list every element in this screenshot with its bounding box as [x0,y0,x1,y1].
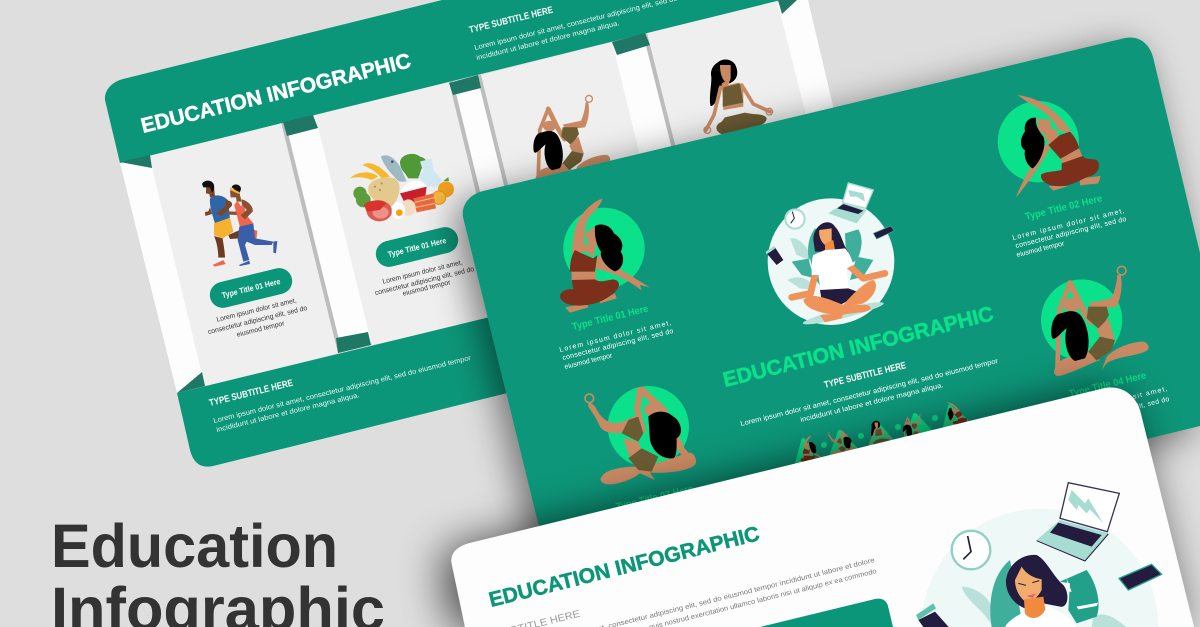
yoga figure 3 [585,386,696,484]
yoga figure 2 [998,95,1101,197]
icon: yoga pose column 3 [533,95,610,182]
text 01: consectetur adipiscing elit, sed do [562,328,674,362]
panel: front white slide [451,387,1194,627]
main title: Education [51,512,338,580]
title 01: Type Title 01 Here [571,304,650,333]
icon: meditating woman column 4 [704,60,773,135]
text 01: eiusmod tempor [564,352,614,371]
mini yoga icon row [797,402,968,465]
panel: back slide with four columns [105,0,860,467]
bottom band body text: Lorem ipsum dolor sit amet, consectetur adipiscing elit, sed do eiusmod tempor [213,355,473,425]
column 1 body text: Lorem ipsum dolor sit amet, [216,297,297,324]
illustration: stressed woman with laptop, clock, phone [916,483,1162,627]
text 01: Lorem ipsum dolor sit amet, [559,320,672,354]
central illustration: meditating woman [766,183,894,328]
body text: incididunt ut labore et dolore magna aliqua. [800,382,944,424]
header body text: incididunt ut labore et dolore magna aliqua. [476,20,620,62]
folded tabs [120,0,797,393]
column 2 body text: consectetur adipiscing elit, sed do [374,266,475,297]
text 02: consectetur adipiscing elit, sed do [1015,216,1127,250]
column 1 pill label: Type Title 01 Here [221,277,282,300]
bottom band [177,300,600,467]
subtitle: TYPE SUBTITLE HERE [823,360,907,391]
text 01 [559,320,674,371]
text 02 [1012,208,1127,259]
column 3 panel [481,42,672,318]
heading: education infographic: EDUCATION INFOGRAPHIC [721,302,996,392]
body text: Lorem ipsum dolor sit amet, consectetur adipiscing elit, sed do eiusmod tempor [740,358,1000,428]
header band [105,0,781,163]
heading: EDUCATION INFOGRAPHIC [487,522,762,612]
column 2 body text: Lorem ipsum dolor sit amet, [382,259,463,286]
main title [51,512,385,627]
column 4 panel [647,0,840,283]
bottom band body text: incididunt ut labore et dolore magna aliqua. [216,392,360,434]
panel: middle green slide [463,37,1200,584]
yoga figure 1 [560,198,650,313]
header subtitle: TYPE SUBTITLE HERE [468,5,554,36]
column 1 pill label [207,265,295,311]
yoga figure 4 [1041,266,1149,376]
column 1 body text: eiusmod tempor [236,320,286,339]
column 1 body text: consectetur adipiscing elit, sed do [207,305,308,336]
bottom band subtitle: TYPE SUBTITLE HERE [208,378,294,409]
text 02: eiusmod tempor [1016,240,1066,259]
text 04: consectetur adipiscing elit, sed do [1058,396,1170,430]
text 04: Lorem ipsum dolor sit amet, [1055,386,1168,420]
icon: runners [202,181,277,267]
icon: healthy food [350,154,454,221]
column 2 body text: eiusmod tempor [402,279,452,298]
column 1 panel [149,122,338,387]
header title: EDUCATION INFOGRAPHIC [139,49,413,138]
title 02: Type Title 02 Here [1024,193,1104,223]
column 2 pill label: Type Title 01 Here [387,236,448,259]
column 2 panel [315,82,510,345]
column 2 pill label [373,224,461,270]
green content panel [760,599,893,627]
title 04: Type Title 04 Here [1068,370,1148,400]
title 03: Type Title 03 Here [615,483,695,513]
text 02: Lorem ipsum dolor sit amet, [1012,208,1125,242]
